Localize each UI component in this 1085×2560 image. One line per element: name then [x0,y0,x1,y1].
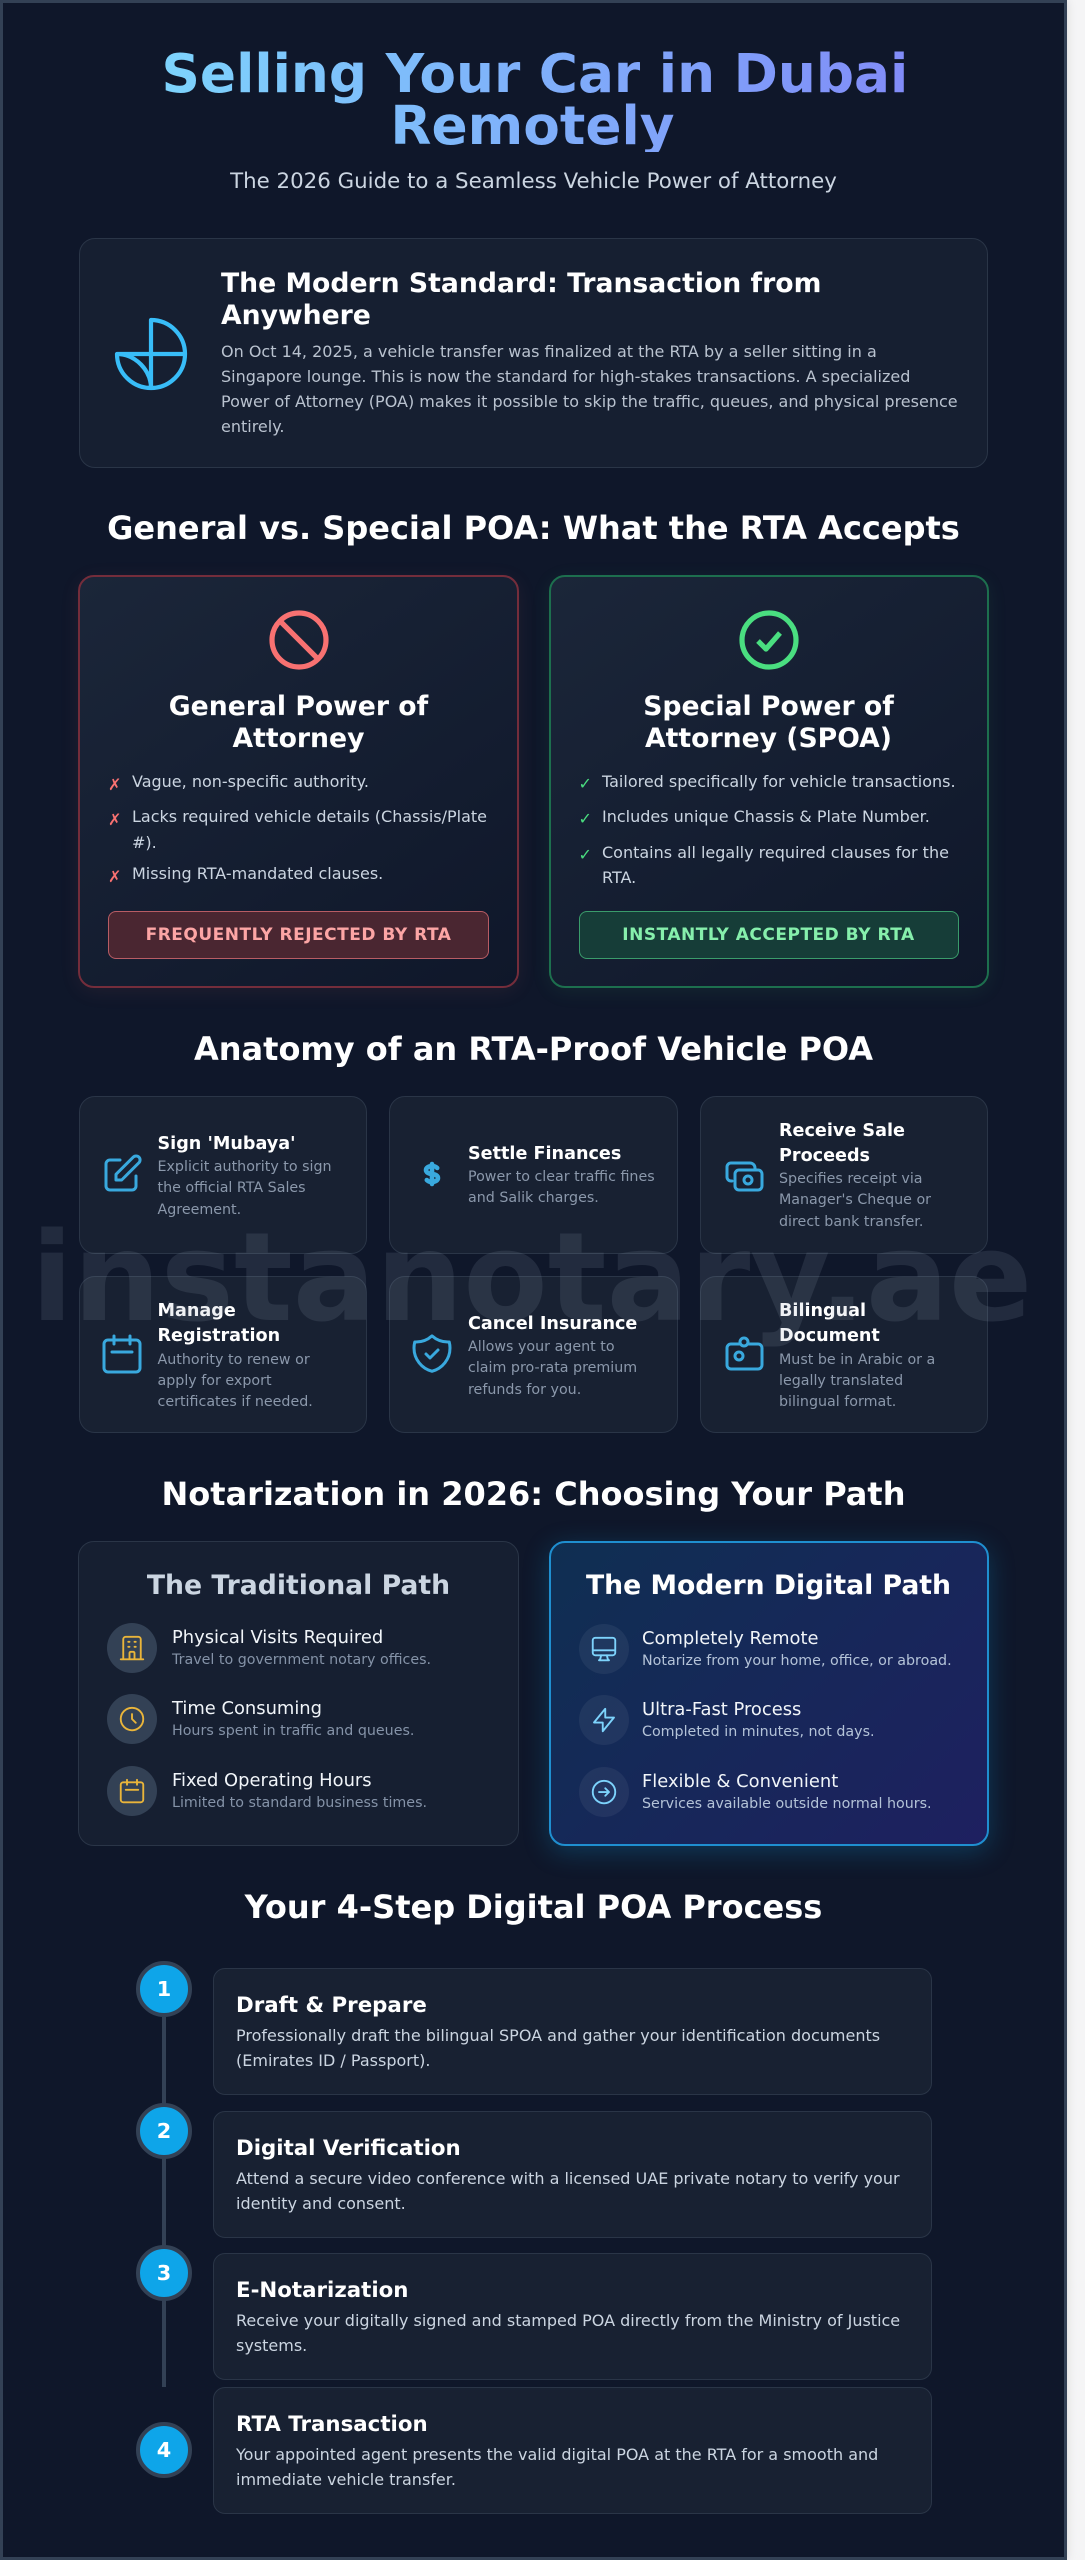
icon: building [107,1623,157,1673]
heading: 4-step process: Your 4-Step Digital POA Process [245,1888,822,1926]
panel: bilingual document [700,1276,988,1433]
item text [468,1339,637,1398]
item title: Receive Sale [779,1120,905,1140]
panel title: The Traditional Path [147,1570,450,1601]
row: remote [579,1624,952,1674]
item title: Settle Finances [468,1144,621,1164]
panel: traditional path [78,1541,519,1846]
list item: Tailored specifically for vehicle transactions. [602,772,956,790]
icon: bolt [578,1695,628,1745]
list item marker: ✓ [578,845,592,864]
badge: rejected [108,911,489,959]
list item marker: ✗ [108,775,121,794]
heading: Anatomy: Anatomy of an RTA-Proof Vehicle POA [194,1030,873,1068]
step text: Receive your digitally signed and stamped POA directly from the Ministry of Justice [236,2311,900,2330]
intro text: entirely. [221,417,284,436]
list item: #). [132,833,157,852]
item text: Specifies receipt via [779,1171,923,1187]
item text: certificates if needed. [158,1394,313,1410]
icon: dollar [424,1162,440,1186]
intro heading: Anywhere [221,300,371,331]
icon: cash [726,1162,764,1192]
step text: Attend a secure video conference with a licensed UAE private notary to verify your [236,2169,900,2188]
item text: Authority to renew or [158,1352,310,1368]
intro text: Power of Attorney (POA) makes it possible to skip the traffic, queues, and physical presence [221,392,958,411]
item title: Document [779,1326,880,1346]
row title: Physical Visits Required [172,1627,383,1648]
item text [779,1171,931,1230]
step text: systems. [236,2336,307,2355]
card title: Attorney (SPOA) [645,723,892,754]
icon: ban [269,610,329,670]
item text: Explicit authority to sign [158,1159,332,1175]
intro text: On Oct 14, 2025, a vehicle transfer was finalized at the RTA by a seller sitting in a [221,342,877,361]
row text: Notarize from your home, office, or abroad. [642,1653,952,1669]
card title: Special Power of [643,691,894,722]
panel: receive proceeds [700,1096,988,1254]
badge: accepted: INSTANTLY ACCEPTED BY RTA [622,925,915,945]
step text [236,2026,880,2070]
item text: direct bank transfer. [779,1214,923,1230]
card title: Attorney [232,723,364,754]
item text: legally translated [779,1373,903,1389]
timeline connector [162,2017,166,2387]
card title: General Power of [169,691,428,722]
list item: Missing RTA-mandated clauses. [132,864,383,883]
row title: Completely Remote [642,1628,818,1649]
step text: immediate vehicle transfer. [236,2470,456,2489]
item text [779,1352,935,1410]
item text: the official RTA Sales [158,1180,306,1196]
item text: Agreement. [158,1202,241,1218]
row title: Ultra-Fast Process [642,1699,801,1720]
step title: Digital Verification [236,2136,461,2161]
panel: modern digital path [548,1541,988,1846]
panel: intro [79,238,988,468]
item text: Must be in Arabic or a [779,1352,935,1368]
item title: Cancel Insurance [468,1314,637,1334]
row text: Limited to standard business times. [172,1795,427,1811]
title: Selling Your Car in Dubai [162,42,908,104]
step 3 number [136,2245,192,2301]
step 1 card [213,1968,932,2095]
step title: RTA Transaction [236,2412,428,2437]
row: time consuming [107,1694,414,1744]
heading: Notarization: Notarization in 2026: Choosing Your Path [162,1474,905,1512]
intro heading [221,268,821,331]
panel title: The Modern Digital Path [586,1570,951,1601]
panel: manage registration [79,1276,367,1433]
row title: Time Consuming [172,1698,322,1719]
icon: arrow circle [578,1767,628,1817]
step 2 card [213,2111,932,2238]
step 4 number [136,2422,192,2478]
item text: Power to clear traffic fines [468,1169,655,1185]
item title: Proceeds [779,1146,870,1166]
list item: Includes unique Chassis & Plate Number. [602,807,930,826]
icon: pencil [104,1154,142,1192]
panel: settle finances [389,1096,678,1254]
icon: shield [412,1334,452,1373]
item text [158,1352,313,1410]
step title: E-Notarization [236,2278,408,2303]
title [162,48,904,152]
heading: General vs Special: General vs. Special POA: What the RTA Accepts [107,509,960,547]
row text: Services available outside normal hours. [642,1796,932,1812]
icon: calendar [102,1334,142,1374]
item title [779,1300,880,1346]
item text [468,1169,655,1206]
step text: Professionally draft the bilingual SPOA and gather your identification documents [236,2026,880,2045]
row: fast [579,1695,875,1745]
step 4 number: 4 [157,2438,171,2462]
step 1 number [136,1961,192,2017]
panel: cancel insurance [389,1276,678,1433]
list item marker: ✗ [108,867,121,886]
icon: id badge [726,1336,764,1370]
list item marker: ✗ [108,810,121,829]
row: physical visits [107,1623,431,1673]
step 2 number: 2 [157,2119,171,2143]
panel: sign mubaya [79,1096,367,1254]
item text: Allows your agent to [468,1339,615,1355]
step 3 number: 3 [157,2261,171,2285]
list item [132,807,487,852]
item title [158,1300,280,1346]
step text [236,2311,900,2355]
intro heading: The Modern Standard: Transaction from [221,268,821,299]
item text: refunds for you. [468,1382,581,1398]
list item marker: ✓ [578,774,592,793]
icon: clock [107,1694,157,1744]
step title: Draft & Prepare [236,1993,427,2018]
icon: calendar [107,1766,157,1816]
item title: Manage [158,1300,236,1320]
row title: Flexible & Convenient [642,1771,838,1792]
card title [643,691,894,754]
subtitle: The 2026 Guide to a Seamless Vehicle Power of Attorney [230,169,837,194]
item title: Bilingual [779,1300,866,1320]
card title [169,691,428,754]
icon: check circle [739,610,799,670]
row text: Completed in minutes, not days. [642,1724,875,1740]
step text: identity and consent. [236,2194,406,2213]
step text [236,2169,900,2213]
item text: and Salik charges. [468,1190,599,1206]
item text: bilingual format. [779,1394,896,1410]
badge: accepted [578,911,958,959]
step text: Your appointed agent presents the valid digital POA at the RTA for a smooth and [236,2445,878,2464]
item text: claim pro-rata premium [468,1360,637,1376]
row text: Travel to government notary offices. [172,1652,431,1668]
item title: Registration [158,1326,280,1346]
item title [779,1120,905,1166]
step 2 number [136,2103,192,2159]
item text: apply for export [158,1373,272,1389]
step text [236,2445,878,2489]
intro text: Singapore lounge. This is now the standard for high-stakes transactions. A specialized [221,367,910,386]
step 4 card [213,2387,932,2514]
row: fixed hours [107,1766,427,1816]
list item: Vague, non-specific authority. [132,772,369,790]
step text: (Emirates ID / Passport). [236,2051,430,2070]
list item: Lacks required vehicle details (Chassis/Plate [132,807,487,826]
row text: Hours spent in traffic and queues. [172,1723,414,1739]
panel: special POA [548,575,988,988]
row: flexible [579,1767,932,1817]
item title: Sign 'Mubaya' [158,1134,296,1154]
icon: monitor [578,1624,628,1674]
watermark: instanotary.ae [31,1206,1032,1350]
list item: Contains all legally required clauses for the [602,842,949,862]
icon: pie globe [114,318,188,390]
list item: RTA. [602,868,636,887]
item text [158,1159,332,1218]
row title: Fixed Operating Hours [172,1770,372,1791]
step 3 card [213,2253,932,2380]
panel: general POA [78,575,519,988]
intro text [221,342,958,436]
title: Remotely [390,94,675,156]
step 1 number: 1 [157,1977,171,2001]
list item marker: ✓ [578,809,592,828]
item text: Manager's Cheque or [779,1192,931,1208]
list item [602,842,949,887]
badge: rejected: FREQUENTLY REJECTED BY RTA [146,925,451,945]
